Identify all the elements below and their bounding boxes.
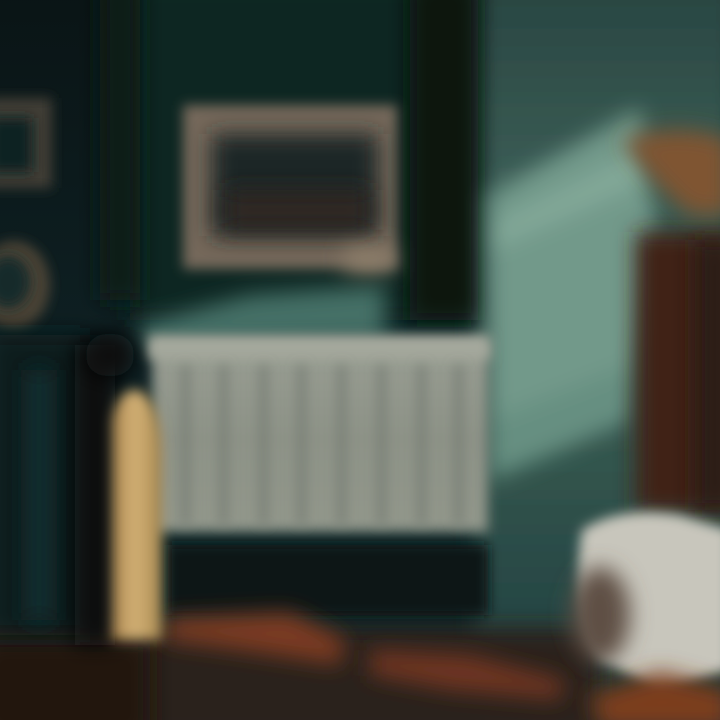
bottle dark cap: [85, 333, 135, 377]
frame border: [183, 105, 397, 269]
round left mirror: [0, 241, 50, 329]
shadow under radiator: [168, 545, 488, 615]
white towel: [570, 512, 720, 690]
floor: [0, 612, 600, 720]
wooden column: [636, 232, 720, 512]
wall band below picture: [140, 285, 385, 345]
radiator: [148, 335, 490, 532]
bottom right rug: [590, 672, 720, 720]
vase on column: [622, 130, 720, 215]
picture interior: [212, 134, 378, 236]
picture frame: [183, 105, 397, 272]
towel shadow side: [570, 567, 630, 663]
picture lower landscape: [225, 190, 370, 230]
yellow bottle: [112, 390, 162, 640]
small left frame: [0, 98, 52, 188]
dark left wall strip: [100, 0, 140, 300]
rug highlight left: [165, 612, 345, 665]
frame bottom-right highlight: [345, 248, 393, 272]
radiator ribs: [182, 365, 462, 525]
dark wall column: [410, 0, 478, 320]
rug highlight right: [370, 650, 565, 700]
dark left furniture: [0, 333, 135, 645]
sunlight patch on right wall: [488, 108, 655, 480]
radiator top rail: [148, 335, 490, 359]
